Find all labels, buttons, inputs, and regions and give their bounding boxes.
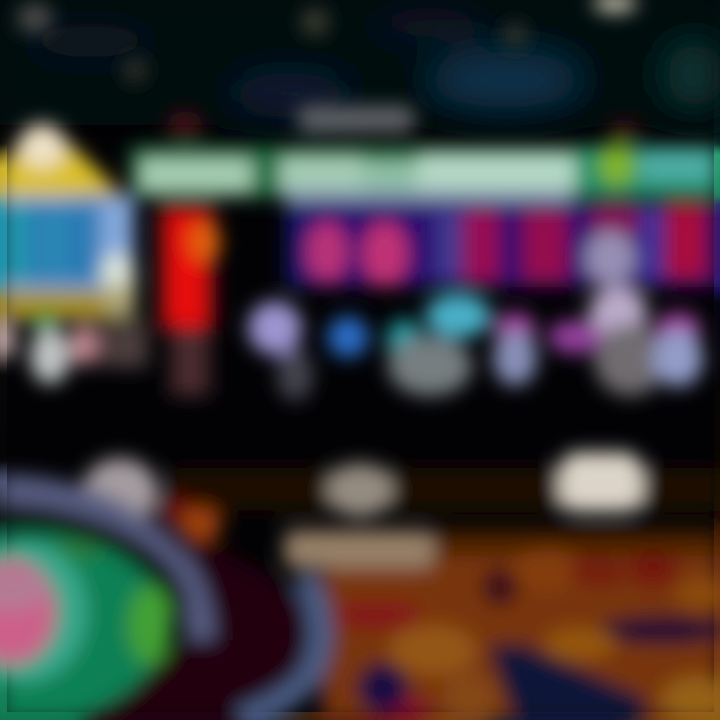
roulette table [0, 489, 321, 720]
slot machine base [0, 285, 148, 384]
beige counter [284, 530, 434, 568]
slot machine screen [0, 196, 135, 299]
purple display band [286, 202, 720, 287]
white signs on floor [82, 452, 642, 526]
orange lamp [158, 494, 222, 543]
green sign band [130, 143, 720, 202]
row of slot lights [248, 287, 703, 401]
slot machine dome [0, 124, 122, 198]
pink wheel centre [0, 560, 56, 664]
blue-grey ring [0, 489, 200, 640]
dark floor strip [170, 468, 720, 510]
outer blue rim [240, 575, 321, 720]
patterned carpet [322, 530, 720, 720]
red column [158, 204, 221, 396]
overhead sign [298, 106, 414, 132]
ceiling spots [17, 0, 641, 139]
dark inner band [0, 515, 178, 612]
green felt [0, 531, 171, 720]
maroon table edge [70, 540, 318, 720]
ceiling lights [0, 0, 720, 125]
